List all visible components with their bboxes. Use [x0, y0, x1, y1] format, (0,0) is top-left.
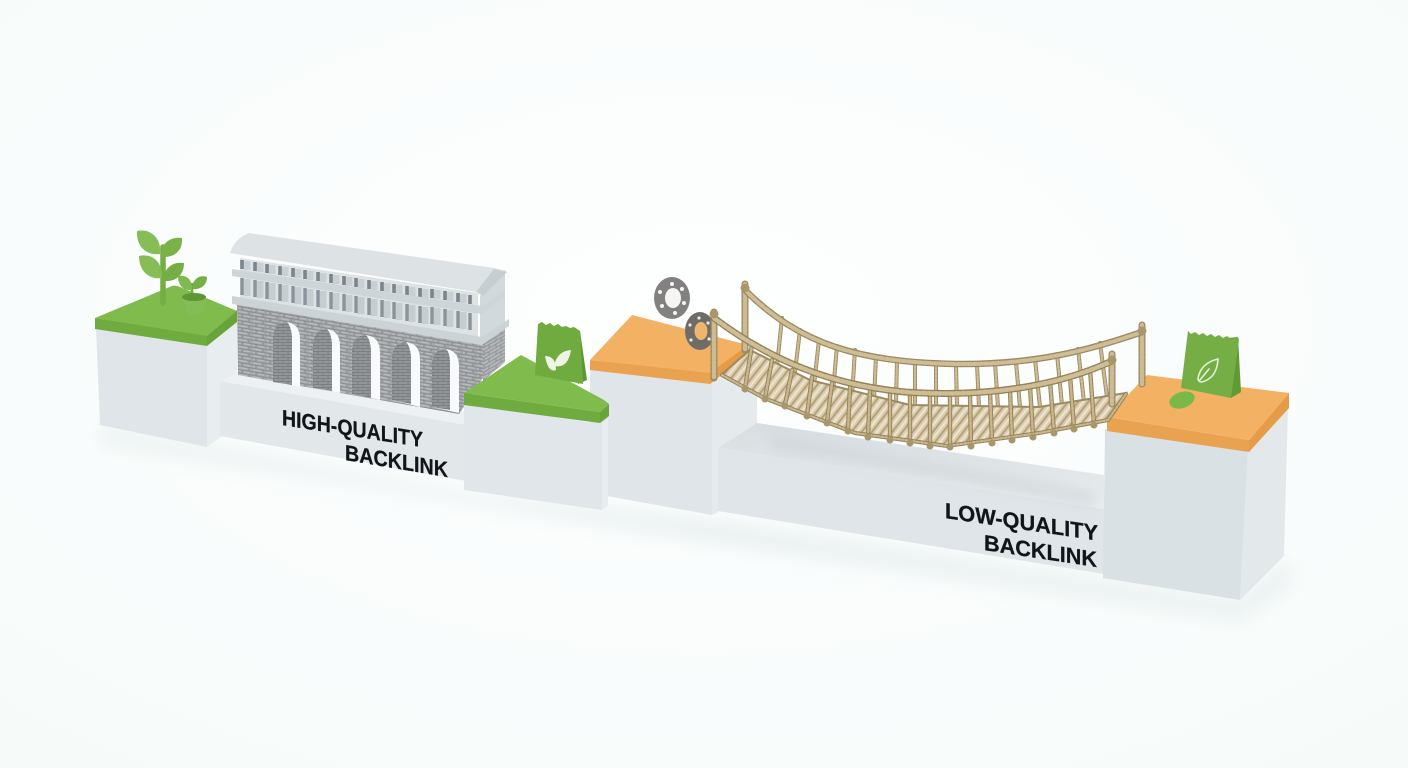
icon: leaf outline	[1198, 359, 1218, 382]
label: low-quality backlink: LOW-QUALITY	[945, 498, 1098, 546]
label: low-quality backlink	[945, 498, 1098, 572]
label: high-quality backlink: BACKLINK	[345, 440, 448, 482]
arches	[273, 322, 459, 413]
icon: green seed bag with leaf outline	[1181, 331, 1241, 398]
label: low-quality backlink: BACKLINK	[984, 530, 1097, 572]
block: right orange pedestal	[1103, 375, 1289, 600]
ledges	[232, 269, 505, 314]
illustration: rope bridge	[710, 284, 1241, 572]
icon: metal washer back	[654, 277, 690, 319]
rope knots	[710, 284, 1146, 450]
icon: potted seedling	[178, 276, 207, 315]
stone side wall	[483, 326, 505, 381]
block: left pedestal with green top	[95, 286, 237, 447]
block: middle pedestal with green top	[464, 355, 609, 510]
label: high-quality backlink: HIGH-QUALITY	[282, 405, 423, 452]
icon: leaf mark	[545, 350, 571, 370]
panel: low-quality side	[95, 230, 1289, 600]
base: low-quality step	[718, 423, 1104, 574]
stone wall	[237, 302, 483, 414]
ground shadow	[100, 428, 1288, 618]
block: orange pedestal	[590, 315, 757, 515]
deck planks	[722, 350, 1126, 446]
roof	[230, 233, 507, 292]
icon: green pebble	[1167, 388, 1197, 412]
upper colonnade	[480, 270, 505, 345]
back ropes	[745, 284, 1142, 407]
base: high-quality step	[220, 372, 466, 481]
front ropes	[710, 284, 1146, 450]
icon: metal washer front	[685, 312, 715, 350]
label: high-quality backlink	[282, 405, 448, 482]
icon: green seed bag	[535, 322, 587, 384]
panel: high-quality side	[95, 230, 609, 510]
illustration: stone aqueduct building	[230, 233, 509, 414]
icon: tall plant	[137, 230, 184, 303]
